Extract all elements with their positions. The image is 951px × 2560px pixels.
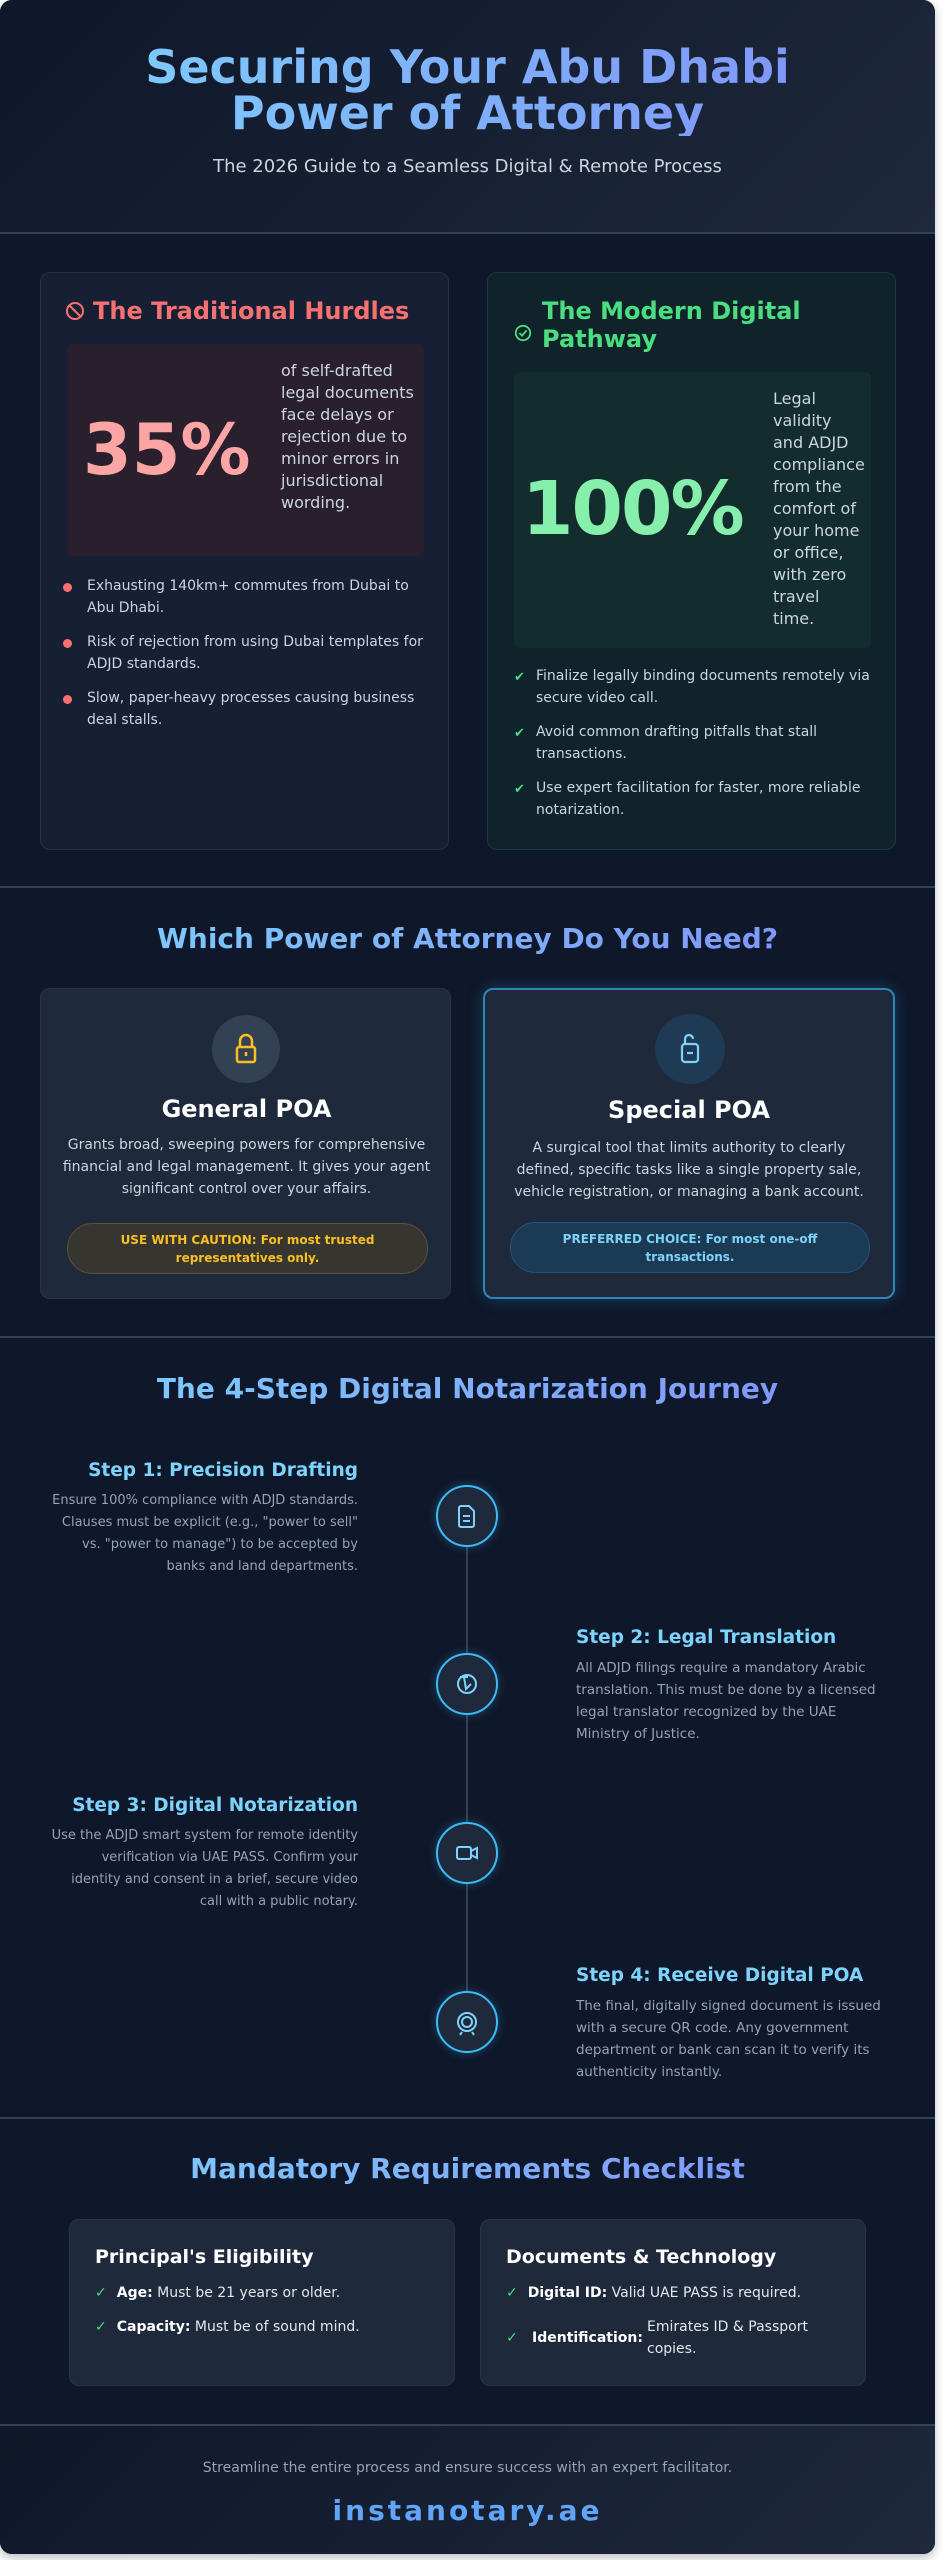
step 4: Step 4: Receive Digital POA (576, 1965, 863, 1986)
pill: caution: representatives only. (176, 1251, 319, 1265)
title (0, 44, 935, 136)
icon: seal (436, 1991, 498, 2053)
pill: preferred: transactions. (646, 1250, 734, 1264)
header (0, 0, 935, 233)
step 3: Step 3: Digital Notarization (72, 1795, 358, 1816)
heading: traditional: The Traditional Hurdles (93, 297, 409, 325)
stat box 100%: Legal validity and ADJD compliance from the comfort of your home or office, with zero travel time. (773, 389, 865, 628)
heading: modern (514, 297, 801, 353)
check list: ✔ (514, 782, 525, 797)
panel: documents & technology: ✓ Digital ID: Valid UAE PASS is required. (506, 2285, 801, 2301)
panel: documents & technology: ✓ (506, 2330, 518, 2346)
panel: principal's eligibility: Principal's Eligibility (95, 2246, 314, 2268)
check list: Use expert facilitation for faster, more reliable notarization. (536, 780, 860, 818)
icon: document (436, 1485, 498, 1547)
heading: requirements: Mandatory Requirements Checklist (190, 2152, 745, 2185)
check list: Avoid common drafting pitfalls that stall transactions. (536, 724, 817, 762)
stat box 35%: of self-drafted legal documents face delays or rejection due to minor errors in jurisdictional wording. (281, 361, 414, 512)
footer (0, 2424, 935, 2554)
check list (514, 668, 870, 818)
heading: modern: Pathway (542, 325, 657, 353)
bullet list: Risk of rejection from using Dubai templates for ADJD standards. (87, 634, 423, 672)
heading: requirements (0, 2152, 935, 2185)
heading: which POA: Which Power of Attorney Do You Need? (157, 922, 778, 955)
stat box 100%: 100% (522, 466, 743, 552)
heading: 4-step journey (0, 1372, 935, 1405)
panel: special POA (483, 988, 895, 1299)
heading: which POA (0, 922, 935, 955)
bullet list: Exhausting 140km+ commutes from Dubai to Abu Dhabi. (87, 578, 409, 616)
icon: padlock (212, 1015, 280, 1083)
icon: translation (436, 1653, 498, 1715)
stat box 35%: 35% (83, 409, 251, 491)
panel: documents & technology: Documents & Technology (506, 2246, 776, 2268)
step 4: The final, digitally signed document is issued with a secure QR code. Any government department or bank can scan it to verify its authenticity instantly. (576, 1998, 881, 2080)
check list: ✔ (514, 670, 525, 685)
pill: caution: USE WITH CAUTION: For most trusted (121, 1233, 374, 1247)
check list: Finalize legally binding documents remotely via secure video call. (536, 668, 870, 706)
bullet list (63, 578, 423, 728)
icon: special (655, 1014, 725, 1084)
step 2: Step 2: Legal Translation (576, 1627, 836, 1648)
panel: principal's eligibility: ✓ Age: Must be 21 years or older. (95, 2285, 340, 2301)
title: Securing Your Abu Dhabi (145, 40, 790, 94)
step 1: Step 1: Precision Drafting (88, 1460, 358, 1481)
description: Grants broad, sweeping powers for comprehensive financial and legal management. It gives your agent significant control over your affairs. (63, 1137, 430, 1197)
panel: documents & technology (480, 2219, 866, 2386)
pill: caution (67, 1223, 428, 1274)
footer text: Streamline the entire process and ensure success with an expert facilitator. (203, 2460, 732, 2476)
panel: documents & technology: Emirates ID & Passport copies. (647, 2319, 808, 2357)
heading: General POA (162, 1095, 331, 1123)
step 3: Use the ADJD smart system for remote identity verification via UAE PASS. Confirm your identity and consent in a brief, secure video call with a public notary. (52, 1828, 358, 1909)
panel: documents & technology: Identification: (532, 2330, 643, 2346)
footer url: instanotary.ae (333, 2494, 602, 2527)
step 1: Ensure 100% compliance with ADJD standards. Clauses must be explicit (e.g., "power to sell" vs. "power to manage") to be accepted by banks and land departments. (52, 1493, 358, 1574)
heading: Special POA (608, 1096, 770, 1124)
panel: traditional hurdles (40, 272, 449, 850)
stat box 35% (67, 344, 424, 556)
pill: preferred: PREFERRED CHOICE: For most one-off (563, 1232, 817, 1246)
panel: principal's eligibility (69, 2219, 455, 2386)
pill: preferred (510, 1222, 870, 1273)
panel: modern digital pathway (487, 272, 896, 850)
check list: ✔ (514, 726, 525, 741)
heading: modern: The Modern Digital (542, 297, 801, 325)
timeline (52, 1460, 881, 2080)
panel: general POA (40, 988, 451, 1299)
step 2: All ADJD filings require a mandatory Arabic translation. This must be done by a licensed legal translator recognized by the UAE Ministry of Justice. (576, 1660, 876, 1742)
subtitle: The 2026 Guide to a Seamless Digital & Remote Process (213, 156, 722, 177)
heading: 4-step journey: The 4-Step Digital Notarization Journey (157, 1372, 778, 1405)
bullet list: Slow, paper-heavy processes causing business deal stalls. (87, 690, 414, 728)
description: A surgical tool that limits authority to clearly defined, specific tasks like a single property sale, vehicle registration, or managing a bank account. (514, 1140, 864, 1200)
icon: video (436, 1822, 498, 1884)
title: Power of Attorney (231, 86, 704, 140)
stat box 100% (514, 372, 871, 648)
panel: principal's eligibility: ✓ Capacity: Must be of sound mind. (95, 2319, 360, 2335)
